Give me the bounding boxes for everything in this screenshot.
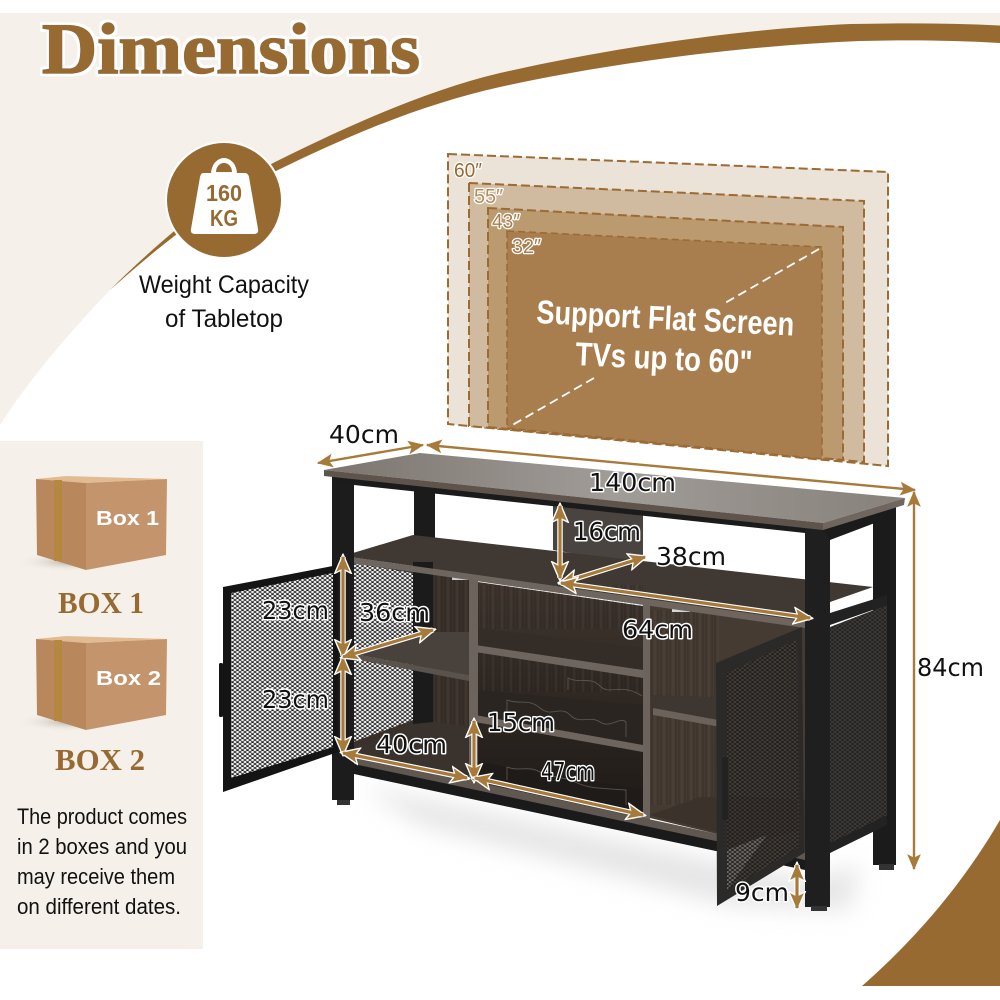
open shelf <box>343 535 873 622</box>
bottom rail <box>353 755 805 870</box>
wine rack waves <box>507 678 642 805</box>
middle wine compartment <box>475 582 643 822</box>
arrow: 47cm <box>475 778 643 815</box>
panel: TV size diagram <box>448 154 888 466</box>
shelf front edge <box>343 556 805 628</box>
left door <box>219 565 338 792</box>
arrow: upper 23cm <box>340 557 346 656</box>
sideboard furniture <box>219 453 905 911</box>
dimension labels: 40cm <box>329 420 399 449</box>
dimension labels: 38cm <box>656 542 726 571</box>
icon: box 2: Box 2 <box>96 668 161 690</box>
dimension labels: 47cm <box>541 757 595 786</box>
weight capacity caption: of Tabletop <box>165 305 283 333</box>
dimension labels: 15cm <box>487 708 555 737</box>
tabletop <box>324 453 905 530</box>
diagonal dashed line <box>509 249 819 427</box>
back legs <box>413 488 896 870</box>
beige header background <box>0 13 1000 425</box>
right door <box>716 627 804 906</box>
arrow: 64cm <box>561 583 810 618</box>
size labels <box>454 160 541 258</box>
arrow: lower 40cm <box>343 753 467 778</box>
arrow: height 84cm <box>913 492 915 869</box>
delivery note: on different dates. <box>17 894 181 919</box>
55 inch outline <box>469 183 864 462</box>
dimension labels: 16cm <box>573 517 641 546</box>
right compartment <box>650 605 805 855</box>
size labels: 60″ <box>454 160 482 182</box>
panel: box information <box>0 441 203 949</box>
size labels: 32″ <box>512 236 541 258</box>
icon: weight 160 KG <box>165 141 283 259</box>
icon: box 1: Box 1 <box>96 508 159 530</box>
top rails <box>335 474 896 540</box>
TV support text <box>536 293 795 381</box>
arrow: width 140cm <box>427 445 915 490</box>
weight capacity caption: Weight Capacity <box>139 271 309 299</box>
TV support text: Support Flat Screen <box>536 293 795 343</box>
icon: weight 160 KG: KG <box>210 205 238 231</box>
dimension labels: 84cm <box>917 653 984 682</box>
dimension arrows <box>318 445 915 908</box>
size labels: 43″ <box>492 211 520 233</box>
left compartment <box>353 560 470 778</box>
TV support text: TVs up to 60" <box>575 335 753 381</box>
60 inch outline <box>448 154 888 466</box>
size labels: 55″ <box>474 186 503 208</box>
delivery note <box>17 804 187 919</box>
box 1 label: BOX 1 <box>58 585 144 620</box>
right side mesh panel <box>830 595 887 853</box>
delivery note: may receive them <box>17 864 175 889</box>
32 inch outline <box>507 231 822 459</box>
arrow: 16cm <box>557 506 563 578</box>
box 2 label: BOX 2 <box>55 742 145 777</box>
icon: box 1 <box>15 476 167 572</box>
dimension labels: 36cm <box>359 598 430 627</box>
dimension labels: 64cm <box>622 615 693 644</box>
dimension labels: 140cm <box>589 468 676 497</box>
weight capacity caption <box>139 271 309 333</box>
floor shadow <box>360 785 860 910</box>
brown bottom-right corner <box>862 820 1000 986</box>
dimension labels: 23cm <box>262 685 329 714</box>
arrow: depth 40cm <box>318 445 423 463</box>
dimension labels: 9cm <box>735 878 789 907</box>
dimension labels: 40cm <box>376 730 447 759</box>
icon: weight 160 KG: 160 <box>206 180 242 206</box>
arrow: lower 23cm <box>340 658 346 753</box>
icon: box 2 <box>15 636 167 732</box>
arrow: 15cm <box>471 721 477 780</box>
cabinet uprights <box>469 578 650 820</box>
dimension labels <box>262 420 984 907</box>
43 inch outline <box>488 208 843 460</box>
front legs <box>332 475 830 911</box>
arrow: 38cm <box>561 557 645 583</box>
title: Dimensions <box>42 9 420 89</box>
dimension labels: 23cm <box>262 596 329 625</box>
arrow: 36cm <box>343 630 433 657</box>
arrow: 9cm <box>794 865 800 908</box>
central back panel <box>553 503 643 565</box>
delivery note: in 2 boxes and you <box>17 834 187 859</box>
delivery note: The product comes <box>17 804 187 829</box>
brown swoosh <box>110 23 1000 290</box>
